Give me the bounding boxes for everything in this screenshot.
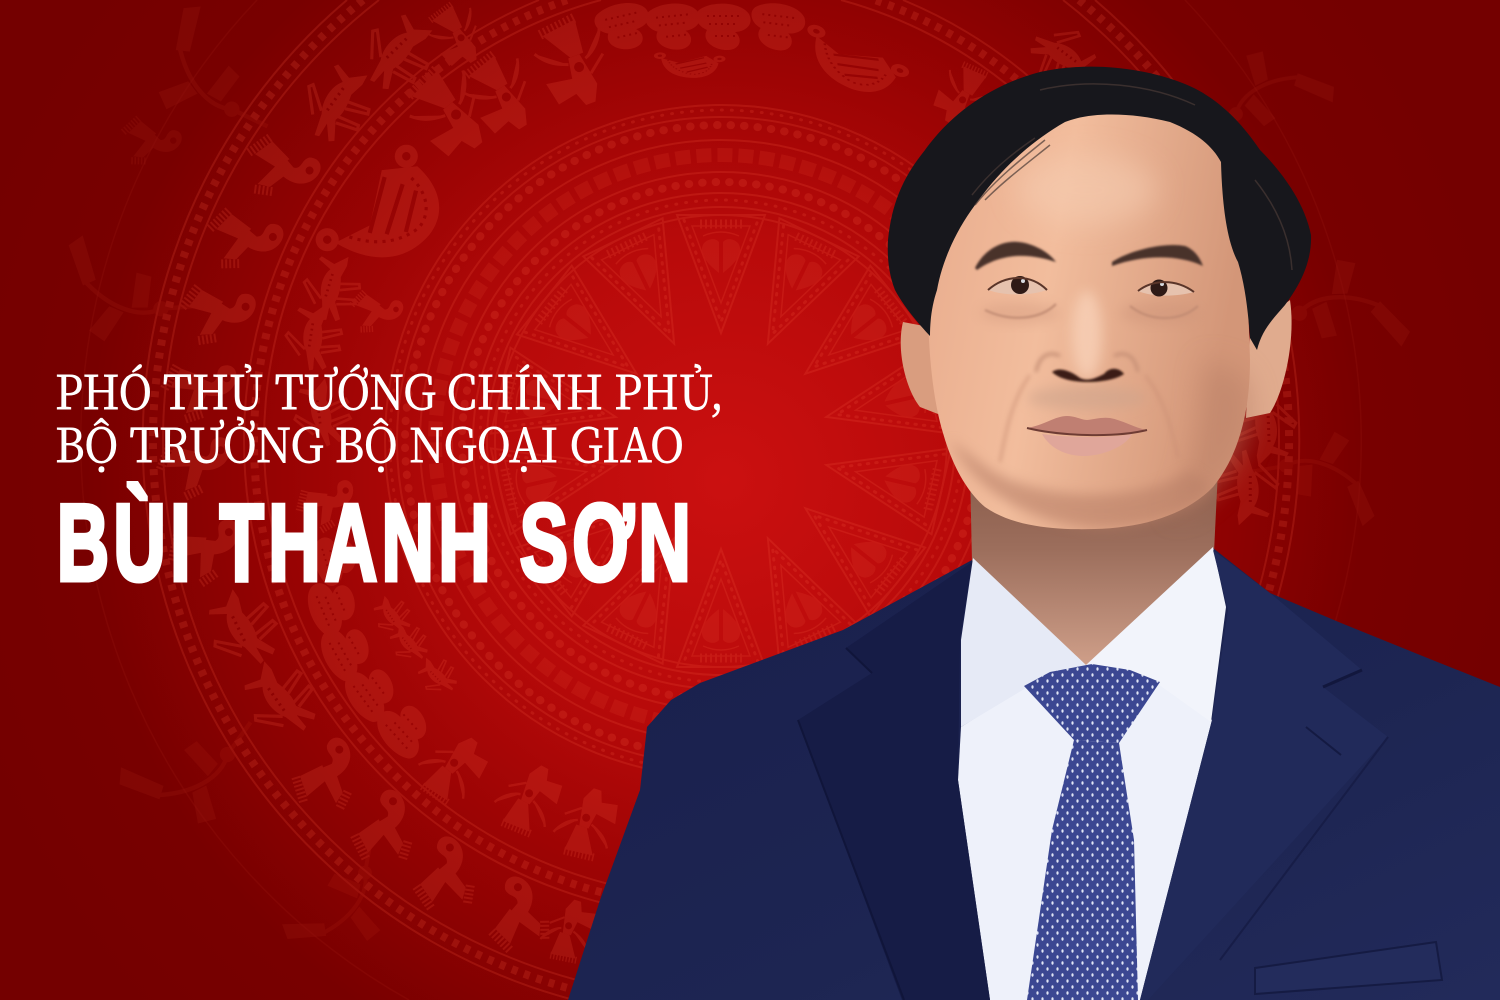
- face: [928, 95, 1250, 529]
- ears: [901, 300, 1292, 418]
- eyebrows: [975, 242, 1203, 270]
- drum star triangles: [491, 215, 951, 667]
- left lapel: [798, 562, 990, 1000]
- face shading: [950, 155, 1251, 528]
- necktie: [1024, 664, 1160, 1000]
- nose: [1036, 354, 1138, 382]
- name: BÙI THANH SƠN: [57, 481, 691, 604]
- suit jacket: [568, 548, 1500, 1000]
- neck: [970, 470, 1218, 668]
- job title: [55, 356, 724, 476]
- breast pocket: [1255, 942, 1442, 994]
- hair strands: [972, 84, 1292, 270]
- hair: [888, 67, 1311, 350]
- portrait of Bùi Thanh Sơn: [568, 67, 1500, 1000]
- drum inner figures ring: [279, 0, 999, 864]
- eyes: [985, 276, 1198, 318]
- job title: BỘ TRƯỞNG BỘ NGOẠI GIAO: [55, 409, 684, 476]
- mouth: [1027, 416, 1147, 456]
- drum outer figures ring: [159, 0, 1297, 965]
- job title: PHÓ THỦ TƯỚNG CHÍNH PHỦ,: [55, 356, 724, 423]
- white shirt and collar: [958, 547, 1226, 1000]
- right lapel: [1140, 550, 1388, 1000]
